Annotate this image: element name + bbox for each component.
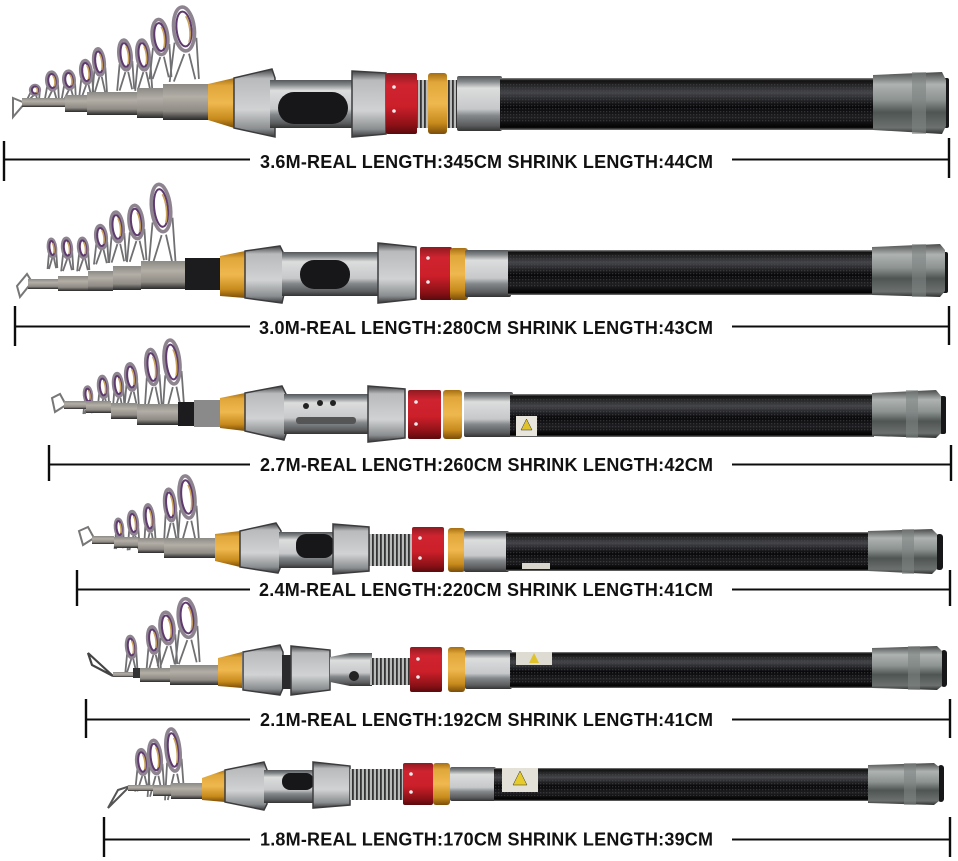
rod 6: 1.8M [104,728,950,857]
rod 2 label: 3.0M-REAL LENGTH:280CM SHRINK LENGTH:43CM [259,318,713,338]
rod 4: 2.4M [77,475,950,606]
rod 3 warning sticker [516,416,537,436]
rod 6 carbon blank [494,768,870,801]
rod 6 warning sticker [502,768,538,792]
rod 4 carbon blank [506,532,870,571]
rod 3: 2.7M [49,339,951,481]
rod 5 tip sections and guides [88,598,218,685]
rod 3 carbon blank [510,394,874,437]
rod 5 dimension line [86,699,950,738]
rod 1 carbon blank [500,78,874,130]
rod 5 warning sticker [516,652,552,665]
rod 4 dimension line [77,570,950,606]
rod 1 butt cap [873,72,949,134]
rod 1: 3.6M [4,6,949,181]
rod 1 label: 3.6M-REAL LENGTH:345CM SHRINK LENGTH:44CM [260,152,713,172]
rod 2 dimension line [15,306,949,346]
rod 4 butt cap [868,529,943,574]
rod 3 tip sections and guides [52,339,186,425]
rod 5 carbon blank [510,652,874,688]
rod 3 label: 2.7M-REAL LENGTH:260CM SHRINK LENGTH:42CM [260,455,713,475]
rod 4 label: 2.4M-REAL LENGTH:220CM SHRINK LENGTH:41CM [259,580,713,600]
rod 2: 3.0M [15,183,949,346]
rod 6 label: 1.8M-REAL LENGTH:170CM SHRINK LENGTH:39CM [260,830,713,850]
rod 2 butt cap [872,244,948,297]
rod 1 dimension line [4,138,949,181]
rod 5 label: 2.1M-REAL LENGTH:192CM SHRINK LENGTH:41CM [260,710,713,730]
rod 3 dimension line [49,445,951,481]
rod 1 tip sections and guides [13,6,208,120]
rod 1 reel seat and grip [208,69,502,137]
rod 5 reel seat and grip [218,645,512,695]
rod 5 butt cap [872,646,947,690]
rod 6 reel seat and grip [202,762,496,810]
rod 6 dimension line [104,817,950,857]
rod 4 reel seat and grip [215,523,509,574]
rod 6 tip sections and guides [108,728,202,808]
rod 5: 2.1M [86,598,950,738]
rod 2 tip sections and guides [17,183,185,297]
rod 3 butt cap [872,390,946,438]
rod 2 carbon blank [508,250,874,295]
rod 2 reel seat and grip [185,243,511,303]
rod 6 butt cap [868,763,944,805]
rod 3 reel seat and grip [178,386,513,442]
rod 4 tip sections and guides [79,475,215,558]
